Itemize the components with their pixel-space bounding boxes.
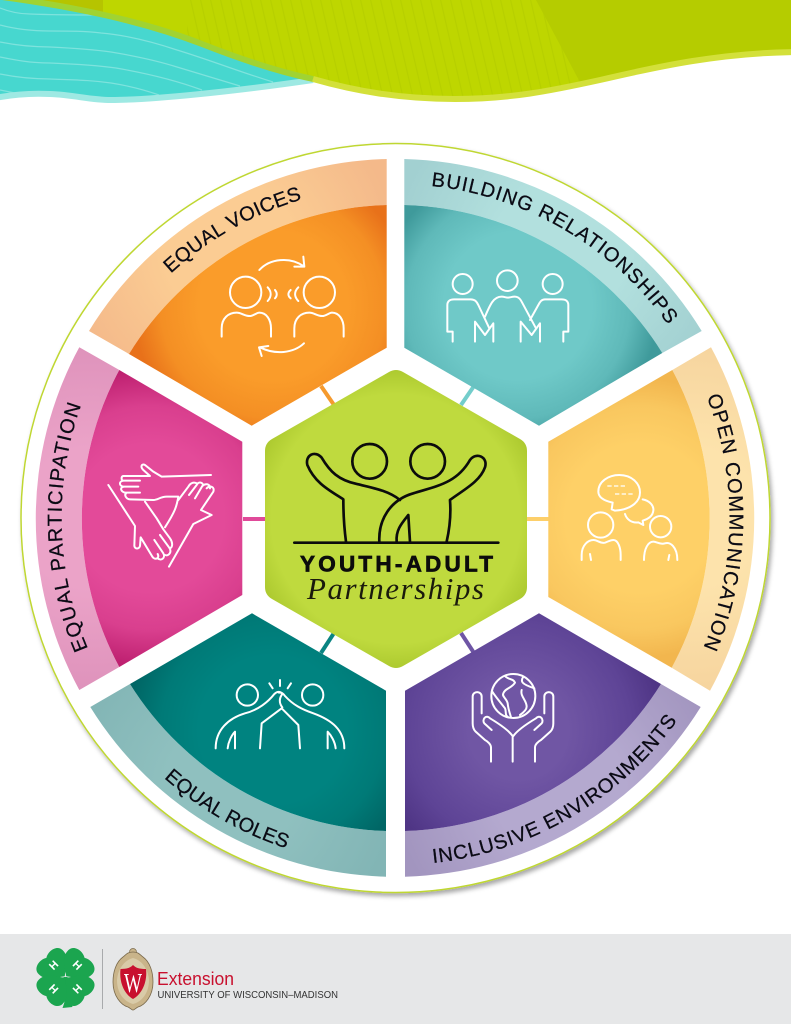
icon: three people holding hands: [447, 270, 568, 342]
icon: two people high five: [216, 680, 344, 748]
logo: 4-H clover: H: [47, 981, 61, 995]
icon: two people with speech bubbles: [582, 475, 677, 560]
panel: building relationships: [404, 159, 702, 426]
logo: two figures with raised arms: [294, 444, 498, 543]
logo: university crest: W: [124, 968, 142, 998]
icon: two people talking: [222, 257, 344, 356]
label: equal participation: EQUAL PARTICIPATION: [48, 402, 88, 652]
logo: 4-H clover: H: [70, 981, 84, 995]
icon: hands holding globe: [473, 674, 553, 762]
logo: 4-H clover: H: [47, 959, 61, 973]
panel: open communication: [548, 347, 754, 691]
panel: inclusive environments: [405, 613, 701, 877]
title: partnerships: Partnerships: [306, 571, 484, 606]
logo: 4-H clover: [33, 944, 98, 1010]
label: inclusive environments: INCLUSIVE ENVIRONMENTS: [433, 714, 676, 863]
panel: equal voices: [89, 159, 387, 426]
teal wave: [0, 0, 313, 100]
text: university of wisconsin-madison: UNIVERSITY OF WISCONSIN–MADISON: [158, 990, 338, 1001]
footer bar: [0, 934, 791, 1024]
panel: equal roles: [90, 613, 386, 877]
logo: university crest: [113, 948, 153, 1010]
icon: three interlocked hands: [108, 465, 214, 567]
divider: [102, 949, 104, 1009]
panel: equal participation: [36, 347, 242, 690]
header wave banner: [0, 0, 791, 100]
label: equal roles: EQUAL ROLES: [165, 768, 289, 848]
label: open communication: OPEN COMMUNICATION: [704, 394, 744, 652]
label: building relationships: BUILDING RELATIONSHIPS: [432, 172, 678, 323]
outer white ring with lime outline: [21, 144, 770, 892]
label: equal voices: EQUAL VOICES: [162, 187, 300, 273]
connector ticks: [243, 386, 549, 653]
title: youth-adult: YOUTH-ADULT: [300, 552, 493, 576]
logo: 4-H clover: H: [70, 959, 84, 973]
text: extension: Extension: [157, 969, 234, 989]
center hexagon: [265, 370, 527, 668]
